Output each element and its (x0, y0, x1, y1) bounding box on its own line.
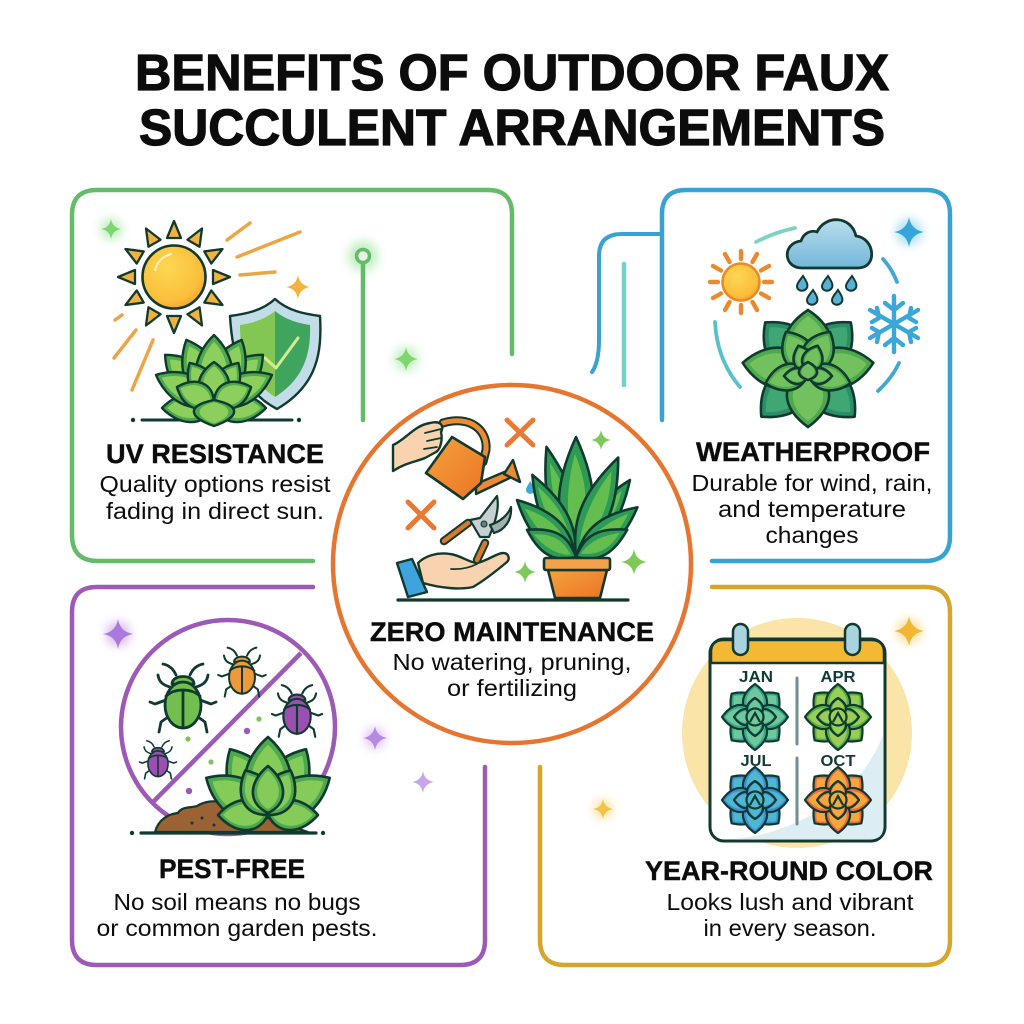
icon: green rosette (805, 684, 871, 750)
panel: weatherproof (592, 190, 950, 561)
heading: UV resistance: UV RESISTANCE (106, 439, 324, 469)
icon: watering can with hand (393, 421, 534, 499)
icon: prohibition circle (121, 620, 335, 834)
text: year-round description: Looks lush and vibrant (666, 889, 914, 915)
text: UV resistance description: Quality options resist (100, 471, 331, 497)
text: zero maintenance description: No watering, pruning, (392, 649, 632, 675)
text: zero maintenance description: or fertilizing (447, 675, 577, 701)
title: SUCCULENT ARRANGEMENTS (139, 99, 885, 156)
panel: year-round color (540, 587, 950, 965)
icon: pruning shears in hand (397, 496, 511, 597)
text: weatherproof description: Durable for wind, rain, (692, 470, 932, 496)
icon: small sun (710, 251, 772, 313)
icon: soil and ground (130, 801, 325, 835)
month label: July: JUL (740, 753, 772, 770)
icon: succulent rosette (196, 737, 340, 831)
heading: year-round color: YEAR-ROUND COLOR (645, 856, 933, 886)
text: weatherproof description: and temperature (718, 496, 906, 522)
text: pest-free description (96, 889, 378, 941)
panel: UV resistance (72, 190, 512, 561)
text: weatherproof description: changes (766, 522, 858, 548)
icon: orange rosette (805, 767, 871, 833)
icon: sun backdrop circle (682, 618, 912, 848)
text: pest-free description: or common garden pests. (96, 915, 378, 941)
icon: teal rosette (722, 684, 788, 750)
icon: sun with rays (114, 221, 310, 390)
text: pest-free description: No soil means no bugs (114, 889, 360, 915)
title (135, 44, 889, 156)
text: zero maintenance description (392, 649, 632, 701)
heading: zero maintenance: ZERO MAINTENANCE (370, 617, 654, 647)
text: UV resistance description (100, 471, 331, 524)
icon: X marks (408, 420, 533, 528)
icon: blue rosette (722, 767, 788, 833)
text: year-round description: in every season. (704, 915, 876, 941)
icon: calendar (710, 624, 885, 841)
icon: beetles (140, 648, 322, 779)
text: year-round description (666, 889, 914, 941)
icon: succulent rosette (740, 308, 876, 432)
month label: January: JAN (739, 669, 773, 686)
icon: snowflake (870, 296, 918, 352)
month label: October: OCT (820, 753, 856, 770)
text: UV resistance description: fading in direct sun. (106, 498, 324, 524)
icon: potted plant (398, 437, 646, 600)
panel: pest-free (72, 587, 511, 965)
icon: weather arcs (715, 228, 899, 391)
icon: shield with check (230, 299, 320, 409)
text: weatherproof description (692, 470, 932, 548)
icon: rain cloud (787, 220, 872, 305)
month label: April: APR (820, 669, 856, 686)
heading: weatherproof: WEATHERPROOF (696, 437, 930, 467)
icon: succulent rosette (131, 333, 301, 426)
panel: zero maintenance (333, 385, 691, 743)
title: BENEFITS OF OUTDOOR FAUX (135, 44, 889, 101)
icon: dots (185, 716, 262, 794)
heading: pest-free: PEST-FREE (159, 854, 305, 884)
